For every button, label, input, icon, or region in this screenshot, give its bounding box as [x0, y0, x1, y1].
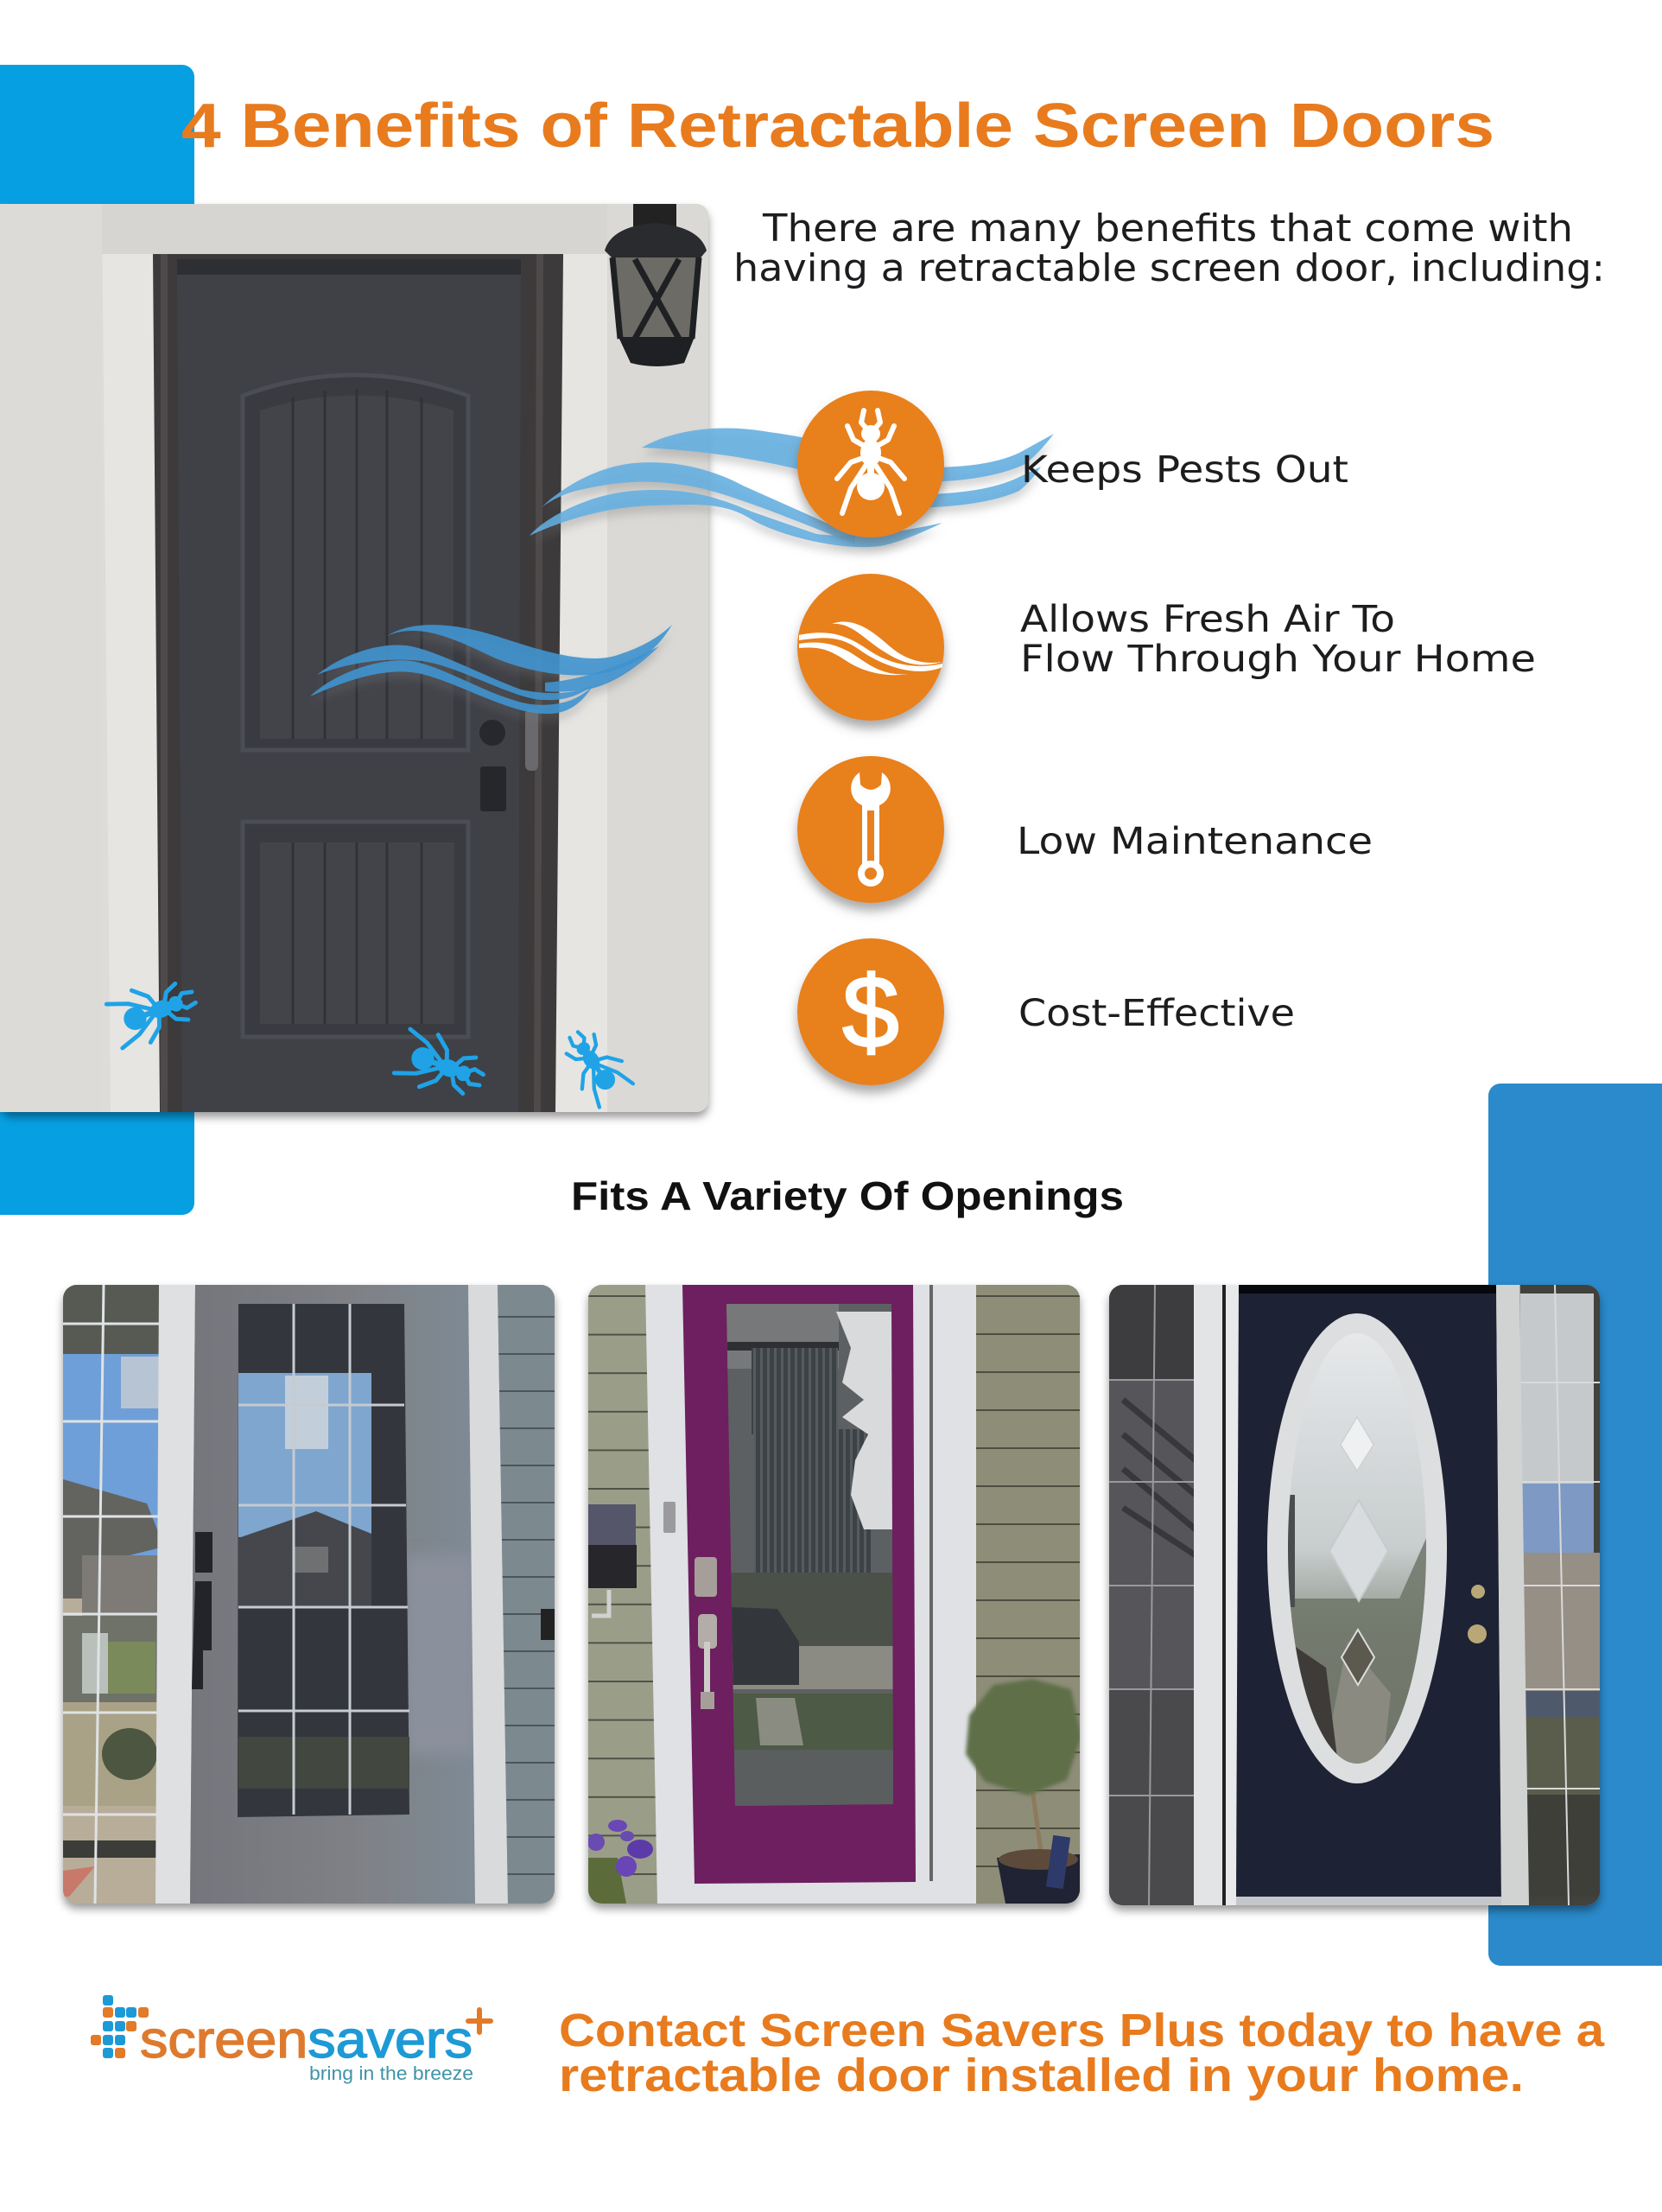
door frame: [153, 254, 563, 1112]
icon: dollar badge: [797, 938, 944, 1085]
blue block: lower left: [0, 1106, 194, 1215]
label: keeps pests out: Keeps Pests Out: [1021, 448, 1348, 492]
label: cost-effective: Cost-Effective: [1018, 992, 1295, 1035]
lantern: [605, 204, 707, 366]
door leaf: [177, 274, 521, 1112]
logo: [91, 1995, 491, 2084]
door hardware: [479, 709, 538, 811]
panel: photo 2 purple door: [587, 1285, 1082, 1904]
right frame: [1496, 1285, 1529, 1905]
intro text: There are many benefits that come with: [762, 207, 1573, 251]
icon: dollar badge: $: [842, 956, 899, 1070]
wind swoosh over door: [310, 625, 672, 714]
oval window: [1267, 1313, 1447, 1783]
door knobs: [1468, 1585, 1487, 1643]
blue block: top left: [0, 65, 194, 207]
white door frame: [155, 1285, 195, 1904]
left sidelight: [1109, 1285, 1196, 1905]
white sliders: [1194, 1285, 1223, 1905]
logo plus: [468, 2010, 491, 2032]
siding right: [976, 1285, 1080, 1904]
wind swoosh to pest icon: [530, 428, 1054, 547]
lower door panel: [243, 822, 468, 1037]
icon: ant badge: [797, 391, 944, 537]
intro text: having a retractable screen door, including:: [733, 246, 1605, 290]
right frame: [468, 1285, 508, 1904]
subheading: Fits A Variety Of Openings: [571, 1173, 1124, 1218]
right frame shadow: [929, 1285, 933, 1881]
lock and handle: [695, 1557, 717, 1709]
siding: [498, 1285, 555, 1904]
white frame: [645, 1285, 976, 1904]
logo wordmark: screensavers: [140, 2011, 473, 2069]
photo wall: [102, 254, 111, 1112]
label: low maintenance: Low Maintenance: [1017, 820, 1373, 863]
title: 4 Benefits of Retractable Screen Doors: [181, 92, 1494, 161]
panel: photo 3 navy door: [1109, 1285, 1600, 1905]
upper door panel: [243, 375, 468, 750]
purple door: [682, 1285, 916, 1884]
handle: [192, 1532, 213, 1689]
mailbox: [588, 1504, 637, 1616]
left sidelight: [63, 1285, 164, 1904]
panel: photo 1 grey door: [63, 1285, 555, 1904]
plant: [966, 1679, 1082, 1904]
door glass: [726, 1304, 899, 1814]
siding left: [588, 1285, 657, 1904]
call to action: [559, 2005, 1605, 2101]
panel: hero door photo: [0, 204, 708, 1112]
call to action: Contact Screen Savers Plus today to have a: [559, 2005, 1605, 2056]
label: fresh air: Allows Fresh Air To: [1020, 598, 1395, 641]
label: fresh air: [1020, 598, 1536, 681]
flowers: [587, 1820, 653, 1904]
ants: [105, 971, 636, 1109]
screen door surface: [190, 1285, 475, 1904]
intro text: [733, 207, 1605, 290]
icon: wind badge: [797, 574, 944, 721]
label: fresh air: Flow Through Your Home: [1020, 638, 1536, 681]
call to action: retractable door installed in your home.: [559, 2050, 1524, 2101]
right sidelight: [1520, 1285, 1600, 1905]
door glass: [238, 1304, 409, 1817]
icon: wrench badge: [797, 756, 944, 903]
logo mark: [91, 1995, 149, 2058]
navy door: [1236, 1285, 1501, 1897]
logo tagline: bring in the breeze: [309, 2063, 473, 2084]
blue block: right: [1488, 1084, 1662, 1966]
